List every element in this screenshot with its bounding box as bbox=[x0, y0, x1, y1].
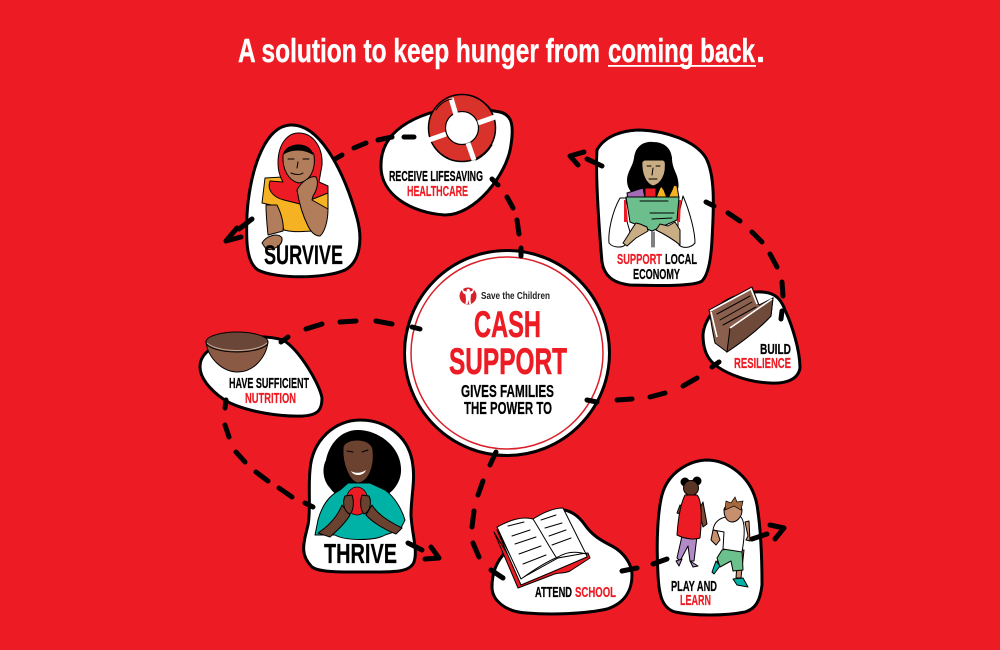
panel: play and learn bbox=[657, 460, 762, 615]
icon: woman carrying grocery box bbox=[609, 142, 695, 247]
heading: cash support bbox=[449, 304, 567, 382]
label: build resilience: BUILD bbox=[760, 342, 791, 358]
label: nutrition: HAVE SUFFICIENT bbox=[229, 376, 309, 392]
arrow: circle to school to play bbox=[472, 452, 784, 578]
panel: survive bbox=[247, 125, 360, 277]
icon: woman in red headscarf bbox=[262, 133, 328, 249]
icon: open book bbox=[494, 508, 590, 588]
arrow: circle to nutrition to thrive bbox=[225, 321, 439, 559]
panel: build resilience bbox=[703, 287, 800, 383]
label: support local economy: ECONOMY bbox=[633, 266, 680, 283]
label: attend school: SCHOOL bbox=[575, 585, 616, 601]
label: support local economy: LOCAL bbox=[665, 251, 697, 268]
arrow: resilience to economy bbox=[570, 152, 783, 402]
title: . bbox=[756, 32, 765, 69]
title: coming back bbox=[608, 32, 755, 69]
heading: cash support: CASH bbox=[474, 304, 541, 345]
text: gives families the power to: GIVES FAMILIES bbox=[461, 381, 554, 401]
label: play and learn: PLAY AND bbox=[671, 579, 717, 595]
icon: bowl bbox=[206, 332, 268, 372]
label: play and learn bbox=[671, 579, 717, 609]
label: support local economy: SUPPORT bbox=[617, 251, 662, 268]
label: nutrition: NUTRITION bbox=[245, 391, 296, 407]
panel: thrive bbox=[304, 420, 415, 572]
logo: save the children bbox=[460, 288, 550, 304]
label: build resilience bbox=[734, 342, 791, 372]
panel: support local economy bbox=[597, 130, 713, 286]
logo: save the children: Save the Children bbox=[481, 290, 550, 302]
text: gives families the power to bbox=[461, 381, 554, 418]
label: healthcare bbox=[389, 169, 483, 200]
icon: open wallet bbox=[709, 287, 773, 352]
panel: cash support centre circle bbox=[404, 250, 610, 456]
label: nutrition bbox=[229, 376, 309, 407]
label: thrive: THRIVE bbox=[324, 538, 397, 569]
icon: two running children bbox=[676, 476, 750, 587]
label: survive: SURVIVE bbox=[264, 240, 343, 270]
label: play and learn: LEARN bbox=[680, 593, 711, 609]
heading: cash support: SUPPORT bbox=[449, 341, 567, 382]
icon: lifebuoy bbox=[428, 94, 496, 162]
label: healthcare: HEALTHCARE bbox=[407, 184, 468, 200]
arrow: healthcare to survive bbox=[226, 137, 521, 256]
text: gives families the power to: THE POWER TO bbox=[464, 398, 552, 418]
panel: have sufficient nutrition bbox=[200, 332, 322, 416]
label: healthcare: RECEIVE LIFESAVING bbox=[389, 169, 483, 185]
label: build resilience: RESILIENCE bbox=[734, 356, 791, 372]
label: support local economy bbox=[617, 251, 697, 283]
title: A solution to keep hunger from bbox=[238, 32, 600, 69]
panel: receive lifesaving healthcare bbox=[381, 94, 512, 215]
label: attend school: ATTEND bbox=[535, 585, 572, 601]
panel: attend school bbox=[492, 508, 632, 614]
icon: woman holding red mug bbox=[315, 430, 405, 540]
